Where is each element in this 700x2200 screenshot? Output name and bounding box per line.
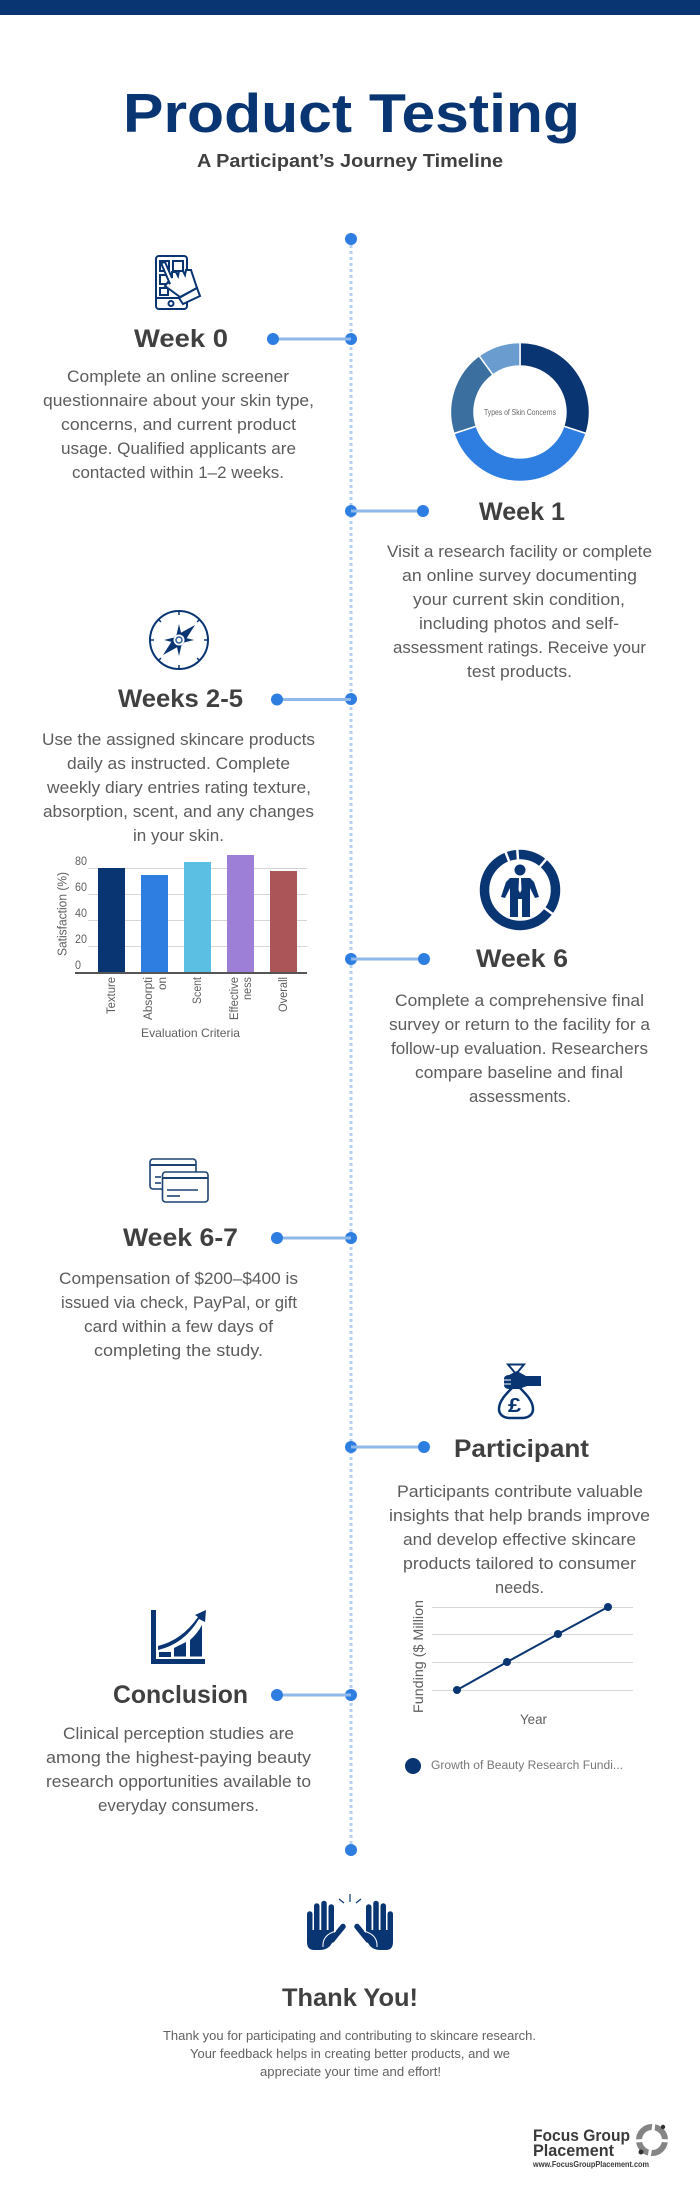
text: thank you: appreciate your time and effort!	[260, 2064, 441, 2079]
text: week 1	[387, 543, 652, 681]
text: week 1: assessment ratings. Receive your	[393, 639, 647, 657]
text: week 6: compare baseline and final	[415, 1064, 623, 1082]
text: week 1: your current skin condition,	[413, 591, 625, 609]
panel: participant	[351, 1364, 650, 1774]
bar chart: satisfaction by criteria: Overall	[278, 977, 290, 1012]
panel: thank you	[163, 1894, 536, 2079]
bar chart: satisfaction by criteria: 80	[75, 856, 87, 868]
text: week 6-7: issued via check, PayPal, or gift	[61, 1294, 297, 1312]
text: thank you: Thank you for participating and contributing to skincare research.	[163, 2028, 536, 2043]
text: conclusion	[46, 1725, 312, 1815]
heading: week 1: Week 1	[479, 498, 565, 526]
panel: week 6-7	[59, 1159, 351, 1360]
logo: focus group placement: Placement	[533, 2141, 614, 2160]
text: conclusion: Clinical perception studies are	[63, 1725, 294, 1743]
logo: focus group placement: Focus Group	[533, 2126, 630, 2145]
icon: hand holding money bag: £	[508, 1395, 521, 1417]
panel: weeks 2-5	[42, 611, 351, 1040]
bar chart: satisfaction by criteria: Texture	[106, 977, 118, 1014]
bar chart: satisfaction by criteria: ness	[242, 977, 254, 1000]
bar chart: satisfaction by criteria: on	[157, 977, 169, 990]
text: participant: needs.	[495, 1579, 544, 1597]
line chart: growth of beauty research funding: Year	[520, 1711, 547, 1727]
heading: conclusion: Conclusion	[113, 1681, 248, 1709]
panel: week 6	[351, 845, 651, 1106]
connector: participant	[351, 1441, 430, 1453]
connector: week 6	[351, 953, 430, 965]
panel: week 1	[351, 342, 652, 681]
donut chart: types of skin concerns	[450, 342, 590, 482]
heading: week 6: Week 6	[476, 945, 568, 973]
text: participant	[389, 1483, 650, 1597]
text: conclusion: everyday consumers.	[98, 1797, 259, 1815]
text: participant: products tailored to consumer	[403, 1555, 637, 1573]
text: week 1: an online survey documenting	[402, 567, 637, 585]
bar chart: satisfaction by criteria: 60	[75, 882, 87, 894]
text: week 6-7: card within a few days of	[84, 1318, 273, 1336]
bar chart: satisfaction by criteria: 20	[75, 934, 87, 946]
logo: focus group placement	[532, 2122, 670, 2169]
line chart: growth of beauty research funding	[405, 1600, 633, 1774]
bar chart: satisfaction by criteria: 40	[75, 908, 87, 920]
text: week 0: Complete an online screener	[67, 368, 290, 386]
bar chart: satisfaction by criteria: Satisfaction (%)	[56, 872, 70, 956]
icon: rising bar graph	[151, 1610, 206, 1664]
text: week 6-7: Compensation of $200–$400 is	[59, 1270, 298, 1288]
text: week 6-7	[59, 1270, 298, 1360]
text: weeks 2-5	[42, 731, 315, 845]
text: week 6	[389, 992, 651, 1106]
connector: week 1	[351, 505, 429, 517]
text: week 0: usage. Qualified applicants are	[61, 440, 296, 458]
text: week 1: Visit a research facility or complete	[387, 543, 652, 561]
title: Product Testing	[123, 82, 580, 144]
text: week 0: contacted within 1–2 weeks.	[72, 464, 284, 482]
text: thank you	[163, 2028, 536, 2079]
heading: weeks 2-5: Weeks 2-5	[118, 685, 243, 713]
text: week 6: follow-up evaluation. Researchers	[391, 1040, 648, 1058]
connector: conclusion	[271, 1689, 351, 1701]
connector: weeks 2-5	[271, 694, 351, 706]
icon: phone with pointing hand	[156, 256, 200, 309]
heading: week 6-7: Week 6-7	[123, 1224, 238, 1252]
icon: hand holding money bag	[499, 1364, 541, 1418]
subtitle: A Participant’s Journey Timeline	[197, 151, 503, 171]
icon: payment cards	[150, 1159, 208, 1202]
text: weeks 2-5: absorption, scent, and any changes	[43, 803, 314, 821]
bar chart: satisfaction by criteria: Evaluation Criteria	[141, 1026, 240, 1040]
bar chart: satisfaction by criteria: Scent	[192, 976, 204, 1004]
donut chart: types of skin concerns: Types of Skin Concerns	[484, 408, 556, 417]
bar chart: satisfaction by criteria: Absorpti	[143, 977, 155, 1020]
icon: person in ring	[484, 845, 556, 926]
bar chart: satisfaction by criteria: 0	[75, 960, 81, 972]
text: week 6: survey or return to the facility for a	[389, 1016, 651, 1034]
text: weeks 2-5: in your skin.	[133, 827, 224, 845]
line chart: growth of beauty research funding: Growth of Beauty Research Fundi...	[431, 1760, 623, 1772]
text: participant: and develop effective skincare	[403, 1531, 636, 1549]
line chart: growth of beauty research funding: Funding ($ Million	[410, 1600, 426, 1713]
heading: participant: Participant	[454, 1435, 590, 1463]
text: participant: Participants contribute valuable	[397, 1483, 643, 1501]
text: thank you: Your feedback helps in creating better products, and we	[190, 2046, 510, 2061]
bar chart: satisfaction by criteria: Effective	[229, 977, 241, 1020]
icon: raised hands	[307, 1894, 393, 1950]
text: week 6: Complete a comprehensive final	[395, 992, 644, 1010]
text: weeks 2-5: Use the assigned skincare products	[42, 731, 315, 749]
text: week 6: assessments.	[469, 1088, 571, 1106]
text: week 1: test products.	[467, 663, 572, 681]
panel: week 0	[43, 256, 351, 482]
text: participant: insights that help brands improve	[389, 1507, 650, 1525]
text: weeks 2-5: weekly diary entries rating texture,	[46, 779, 311, 797]
top bar	[0, 0, 700, 15]
heading: thank you: Thank You!	[282, 1984, 418, 2012]
bar chart: satisfaction by criteria	[56, 855, 307, 1040]
connector: week 6-7	[271, 1232, 351, 1244]
timeline axis	[345, 233, 357, 1856]
text: week 0	[43, 368, 314, 482]
text: conclusion: research opportunities available to	[46, 1773, 311, 1791]
text: week 0: concerns, and current product	[61, 416, 296, 434]
text: weeks 2-5: daily as instructed. Complete	[67, 755, 290, 773]
text: conclusion: among the highest-paying beauty	[46, 1749, 312, 1767]
text: week 6-7: completing the study.	[94, 1342, 263, 1360]
text: week 1: including photos and self-	[419, 615, 619, 633]
panel: conclusion	[46, 1610, 351, 1815]
connector: week 0	[267, 333, 351, 345]
logo: focus group placement: www.FocusGroupPlacement.com	[532, 2160, 649, 2169]
text: week 0: questionnaire about your skin type,	[43, 392, 314, 410]
heading: week 0: Week 0	[134, 325, 228, 353]
icon: compass	[150, 611, 208, 669]
